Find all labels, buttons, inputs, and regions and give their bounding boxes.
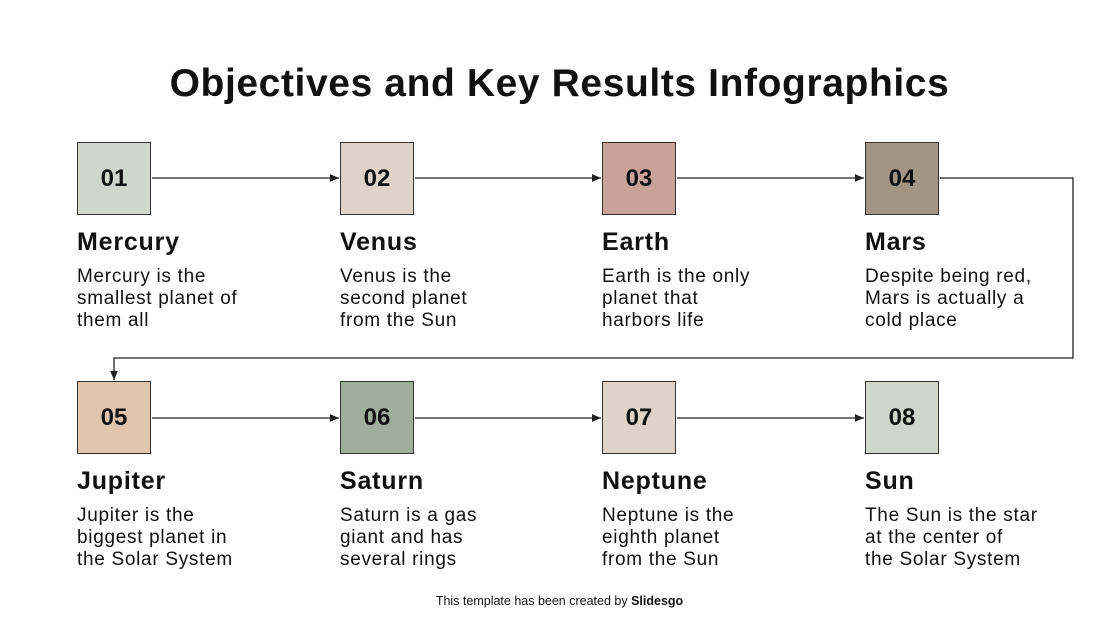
text Jupiter: Jupiter is the <box>77 505 195 526</box>
text Earth: planet that <box>602 288 698 309</box>
heading Mercury: Mercury <box>77 228 180 256</box>
step 02 <box>340 142 414 215</box>
step 01 <box>77 142 151 215</box>
step 06: 06 <box>364 404 390 430</box>
text Earth <box>602 266 750 331</box>
heading Venus: Venus <box>340 228 418 256</box>
text Venus: Venus is the <box>340 266 452 287</box>
text Venus: second planet <box>340 288 467 309</box>
text Sun <box>865 505 1038 570</box>
text Mercury <box>77 266 237 331</box>
text Saturn: giant and has <box>340 527 463 548</box>
text Sun: at the center of <box>865 527 1003 548</box>
text Jupiter <box>77 505 233 570</box>
text Saturn <box>340 505 477 570</box>
step 06 <box>340 381 414 454</box>
step 04: 04 <box>889 164 915 192</box>
title: Objectives and Key Results Infographics <box>170 62 949 105</box>
step 08 <box>865 381 939 454</box>
text Sun: The Sun is the star <box>865 505 1038 526</box>
step 08: 08 <box>889 404 915 430</box>
text Mars: Despite being red, <box>865 266 1032 287</box>
text Mars <box>865 266 1032 331</box>
step 03: 03 <box>626 164 652 192</box>
text Mercury: them all <box>77 310 149 331</box>
step 05 <box>77 381 151 454</box>
step 01: 01 <box>101 164 127 192</box>
heading Mars: Mars <box>865 228 927 256</box>
text Neptune: from the Sun <box>602 549 719 570</box>
heading Saturn: Saturn <box>340 467 424 495</box>
step 05: 05 <box>101 404 127 430</box>
step 04 <box>865 142 939 215</box>
text Mars: cold place <box>865 310 958 331</box>
footer credit: This template has been created by Slidesgo <box>436 594 683 608</box>
step 07 <box>602 381 676 454</box>
text Saturn: Saturn is a gas <box>340 505 477 526</box>
heading Sun: Sun <box>865 467 915 495</box>
step 07: 07 <box>626 404 652 430</box>
text Mercury: smallest planet of <box>77 288 237 309</box>
step 03 <box>602 142 676 215</box>
heading Jupiter: Jupiter <box>77 467 166 495</box>
text Jupiter: the Solar System <box>77 549 233 570</box>
text Jupiter: biggest planet in <box>77 527 227 548</box>
step 02: 02 <box>364 164 390 192</box>
text Earth: harbors life <box>602 310 704 331</box>
text Neptune: Neptune is the <box>602 505 734 526</box>
text Mercury: Mercury is the <box>77 266 206 287</box>
text Earth: Earth is the only <box>602 266 750 287</box>
heading Earth: Earth <box>602 228 670 256</box>
text Mars: Mars is actually a <box>865 288 1024 309</box>
text Saturn: several rings <box>340 549 457 570</box>
text Neptune <box>602 505 734 570</box>
heading Neptune: Neptune <box>602 467 708 495</box>
text Venus: from the Sun <box>340 310 457 331</box>
text Venus <box>340 266 467 331</box>
text Sun: the Solar System <box>865 549 1021 570</box>
text Neptune: eighth planet <box>602 527 720 548</box>
